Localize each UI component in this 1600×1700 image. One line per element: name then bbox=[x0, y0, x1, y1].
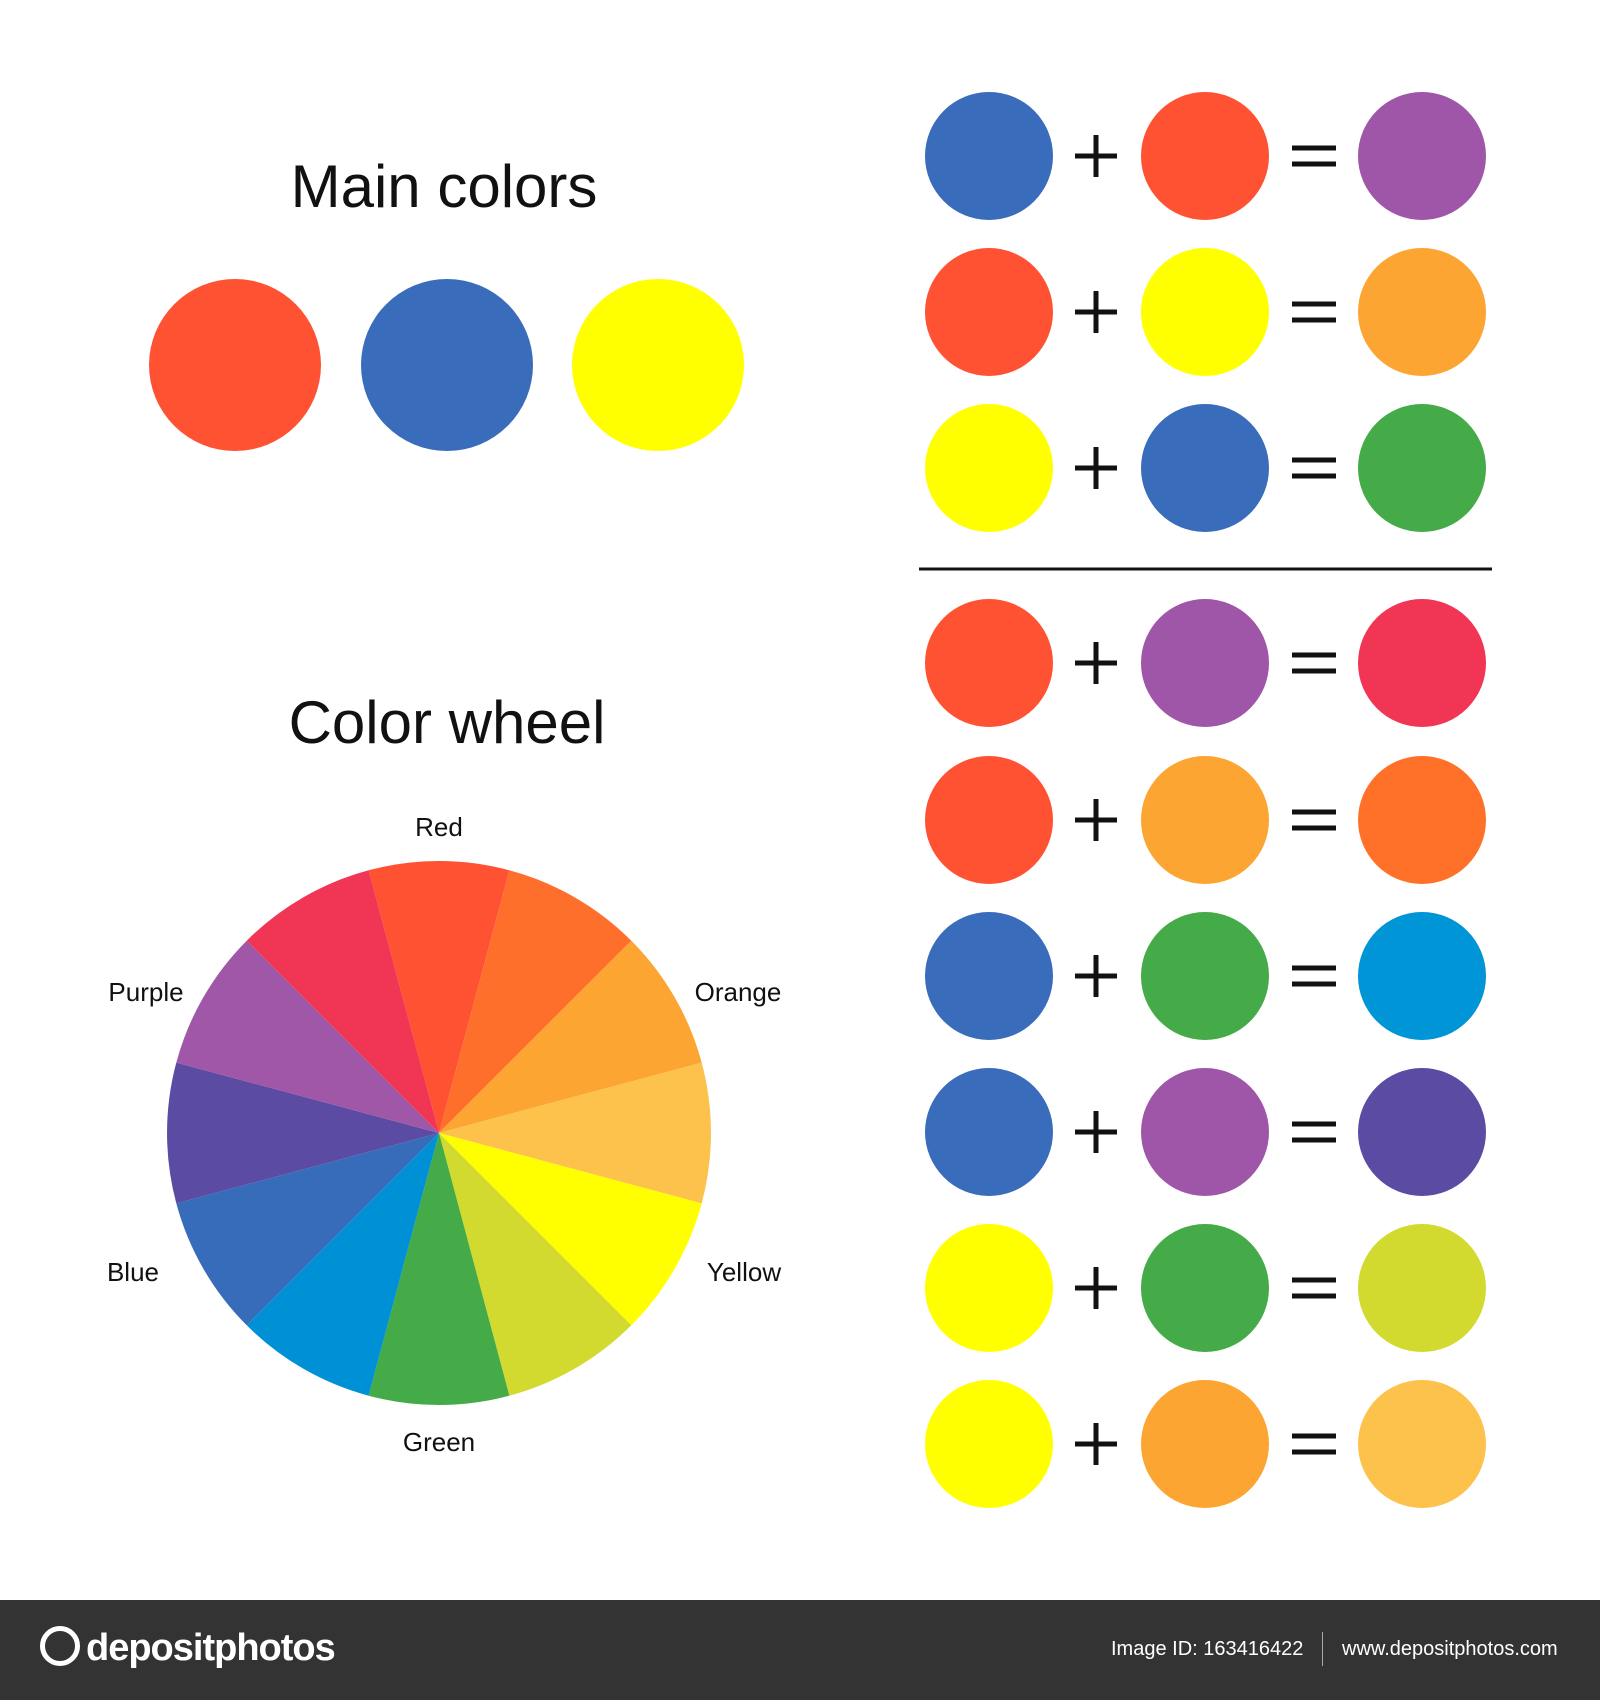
wheel labels: Blue bbox=[107, 1257, 159, 1287]
footer logo: depositphotos bbox=[86, 1627, 335, 1669]
title: color wheel: Color wheel bbox=[289, 689, 605, 756]
footer bar: www.depositphotos.com bbox=[1342, 1638, 1558, 1660]
wheel labels: Purple bbox=[108, 977, 184, 1007]
wheel labels: Orange bbox=[695, 977, 781, 1007]
footer info: Image ID: 163416422 bbox=[1111, 1638, 1303, 1660]
wheel labels: Green bbox=[403, 1427, 475, 1457]
wheel labels bbox=[107, 812, 782, 1457]
footer bar bbox=[0, 1600, 1600, 1700]
wheel labels: Red bbox=[415, 812, 463, 842]
wheel labels: Yellow bbox=[707, 1257, 781, 1287]
color wheel chart bbox=[167, 861, 711, 1405]
title: main colors: Main colors bbox=[291, 153, 597, 220]
